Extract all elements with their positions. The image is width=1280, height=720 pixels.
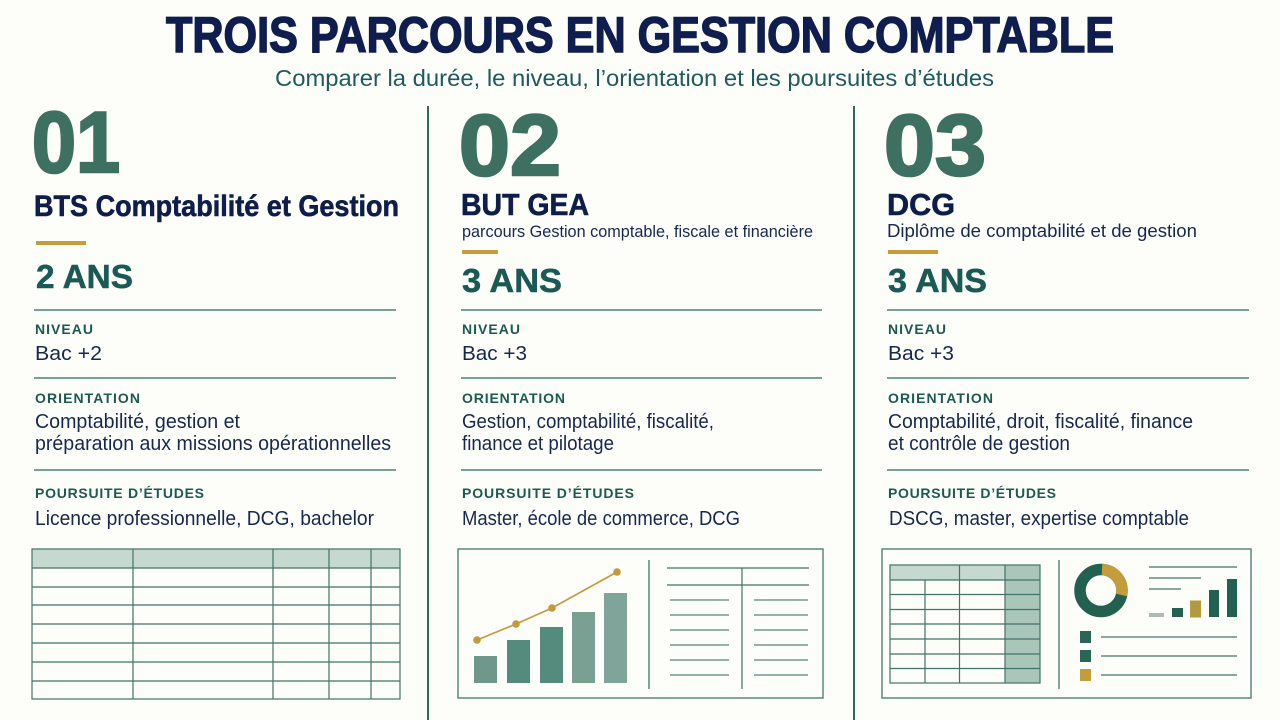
spreadsheet: [890, 565, 1040, 683]
orientation text: Comptabilité, droit, fiscalité, finance: [888, 411, 1193, 433]
poursuite label: POURSUITE D’ÉTUDES: [462, 485, 634, 501]
small bars: [1149, 579, 1237, 618]
heading DCG: DCG: [887, 187, 955, 222]
duration: 3 ANS: [462, 262, 562, 299]
illustration: chart and ledger: [458, 549, 823, 698]
number 02: 02: [459, 98, 561, 194]
poursuite text: DSCG, master, expertise comptable: [889, 508, 1189, 530]
orientation text: finance et pilotage: [462, 433, 614, 455]
number 01: 01: [32, 95, 120, 191]
accent bar: [888, 250, 938, 254]
orientation text: préparation aux missions opérationnelles: [35, 433, 391, 455]
poursuite label: POURSUITE D’ÉTUDES: [888, 485, 1056, 501]
ledger lines: [667, 568, 809, 689]
orientation text: et contrôle de gestion: [888, 433, 1070, 455]
duration: 3 ANS: [888, 262, 987, 299]
illustration: dashboard: [882, 549, 1251, 698]
duration: 2 ANS: [36, 258, 133, 295]
poursuite text: Master, école de commerce, DCG: [462, 508, 740, 530]
orientation label: ORIENTATION: [888, 390, 993, 406]
number 03: 03: [884, 98, 986, 194]
line trend: [473, 568, 621, 644]
illustration: table: [32, 549, 400, 699]
poursuite text: Licence professionnelle, DCG, bachelor: [35, 508, 374, 530]
accent bar: [462, 250, 498, 254]
panel: BUT GEA: [458, 98, 823, 698]
orientation text: [35, 411, 391, 455]
orientation text: Comptabilité, gestion et: [35, 411, 240, 433]
subtitle: Comparer la durée, le niveau, l’orientation et les poursuites d’études: [275, 65, 994, 91]
accent bar: [36, 241, 86, 245]
subheading: Diplôme de comptabilité et de gestion: [887, 221, 1197, 241]
legend: [1080, 631, 1237, 681]
orientation text: [888, 411, 1193, 455]
niveau label: NIVEAU: [888, 321, 946, 337]
orientation text: [462, 411, 714, 455]
orientation label: ORIENTATION: [462, 390, 565, 406]
donut chart: [1080, 570, 1122, 612]
title: TROIS PARCOURS EN GESTION COMPTABLE: [166, 7, 1114, 63]
text lines: [1149, 567, 1237, 589]
heading BUT GEA: BUT GEA: [461, 187, 589, 222]
niveau label: NIVEAU: [462, 321, 520, 337]
heading BTS: BTS Comptabilité et Gestion: [34, 190, 399, 223]
bar chart: [474, 593, 627, 683]
orientation label: ORIENTATION: [35, 390, 140, 406]
orientation text: Gestion, comptabilité, fiscalité,: [462, 411, 714, 433]
poursuite label: POURSUITE D’ÉTUDES: [35, 485, 204, 501]
niveau value: Bac +2: [35, 343, 102, 365]
panel: BTS: [32, 95, 400, 699]
panel: DCG: [882, 98, 1251, 698]
niveau label: NIVEAU: [35, 321, 93, 337]
subheading: parcours Gestion comptable, fiscale et financière: [462, 222, 813, 241]
niveau value: Bac +3: [462, 343, 527, 365]
niveau value: Bac +3: [888, 343, 954, 365]
